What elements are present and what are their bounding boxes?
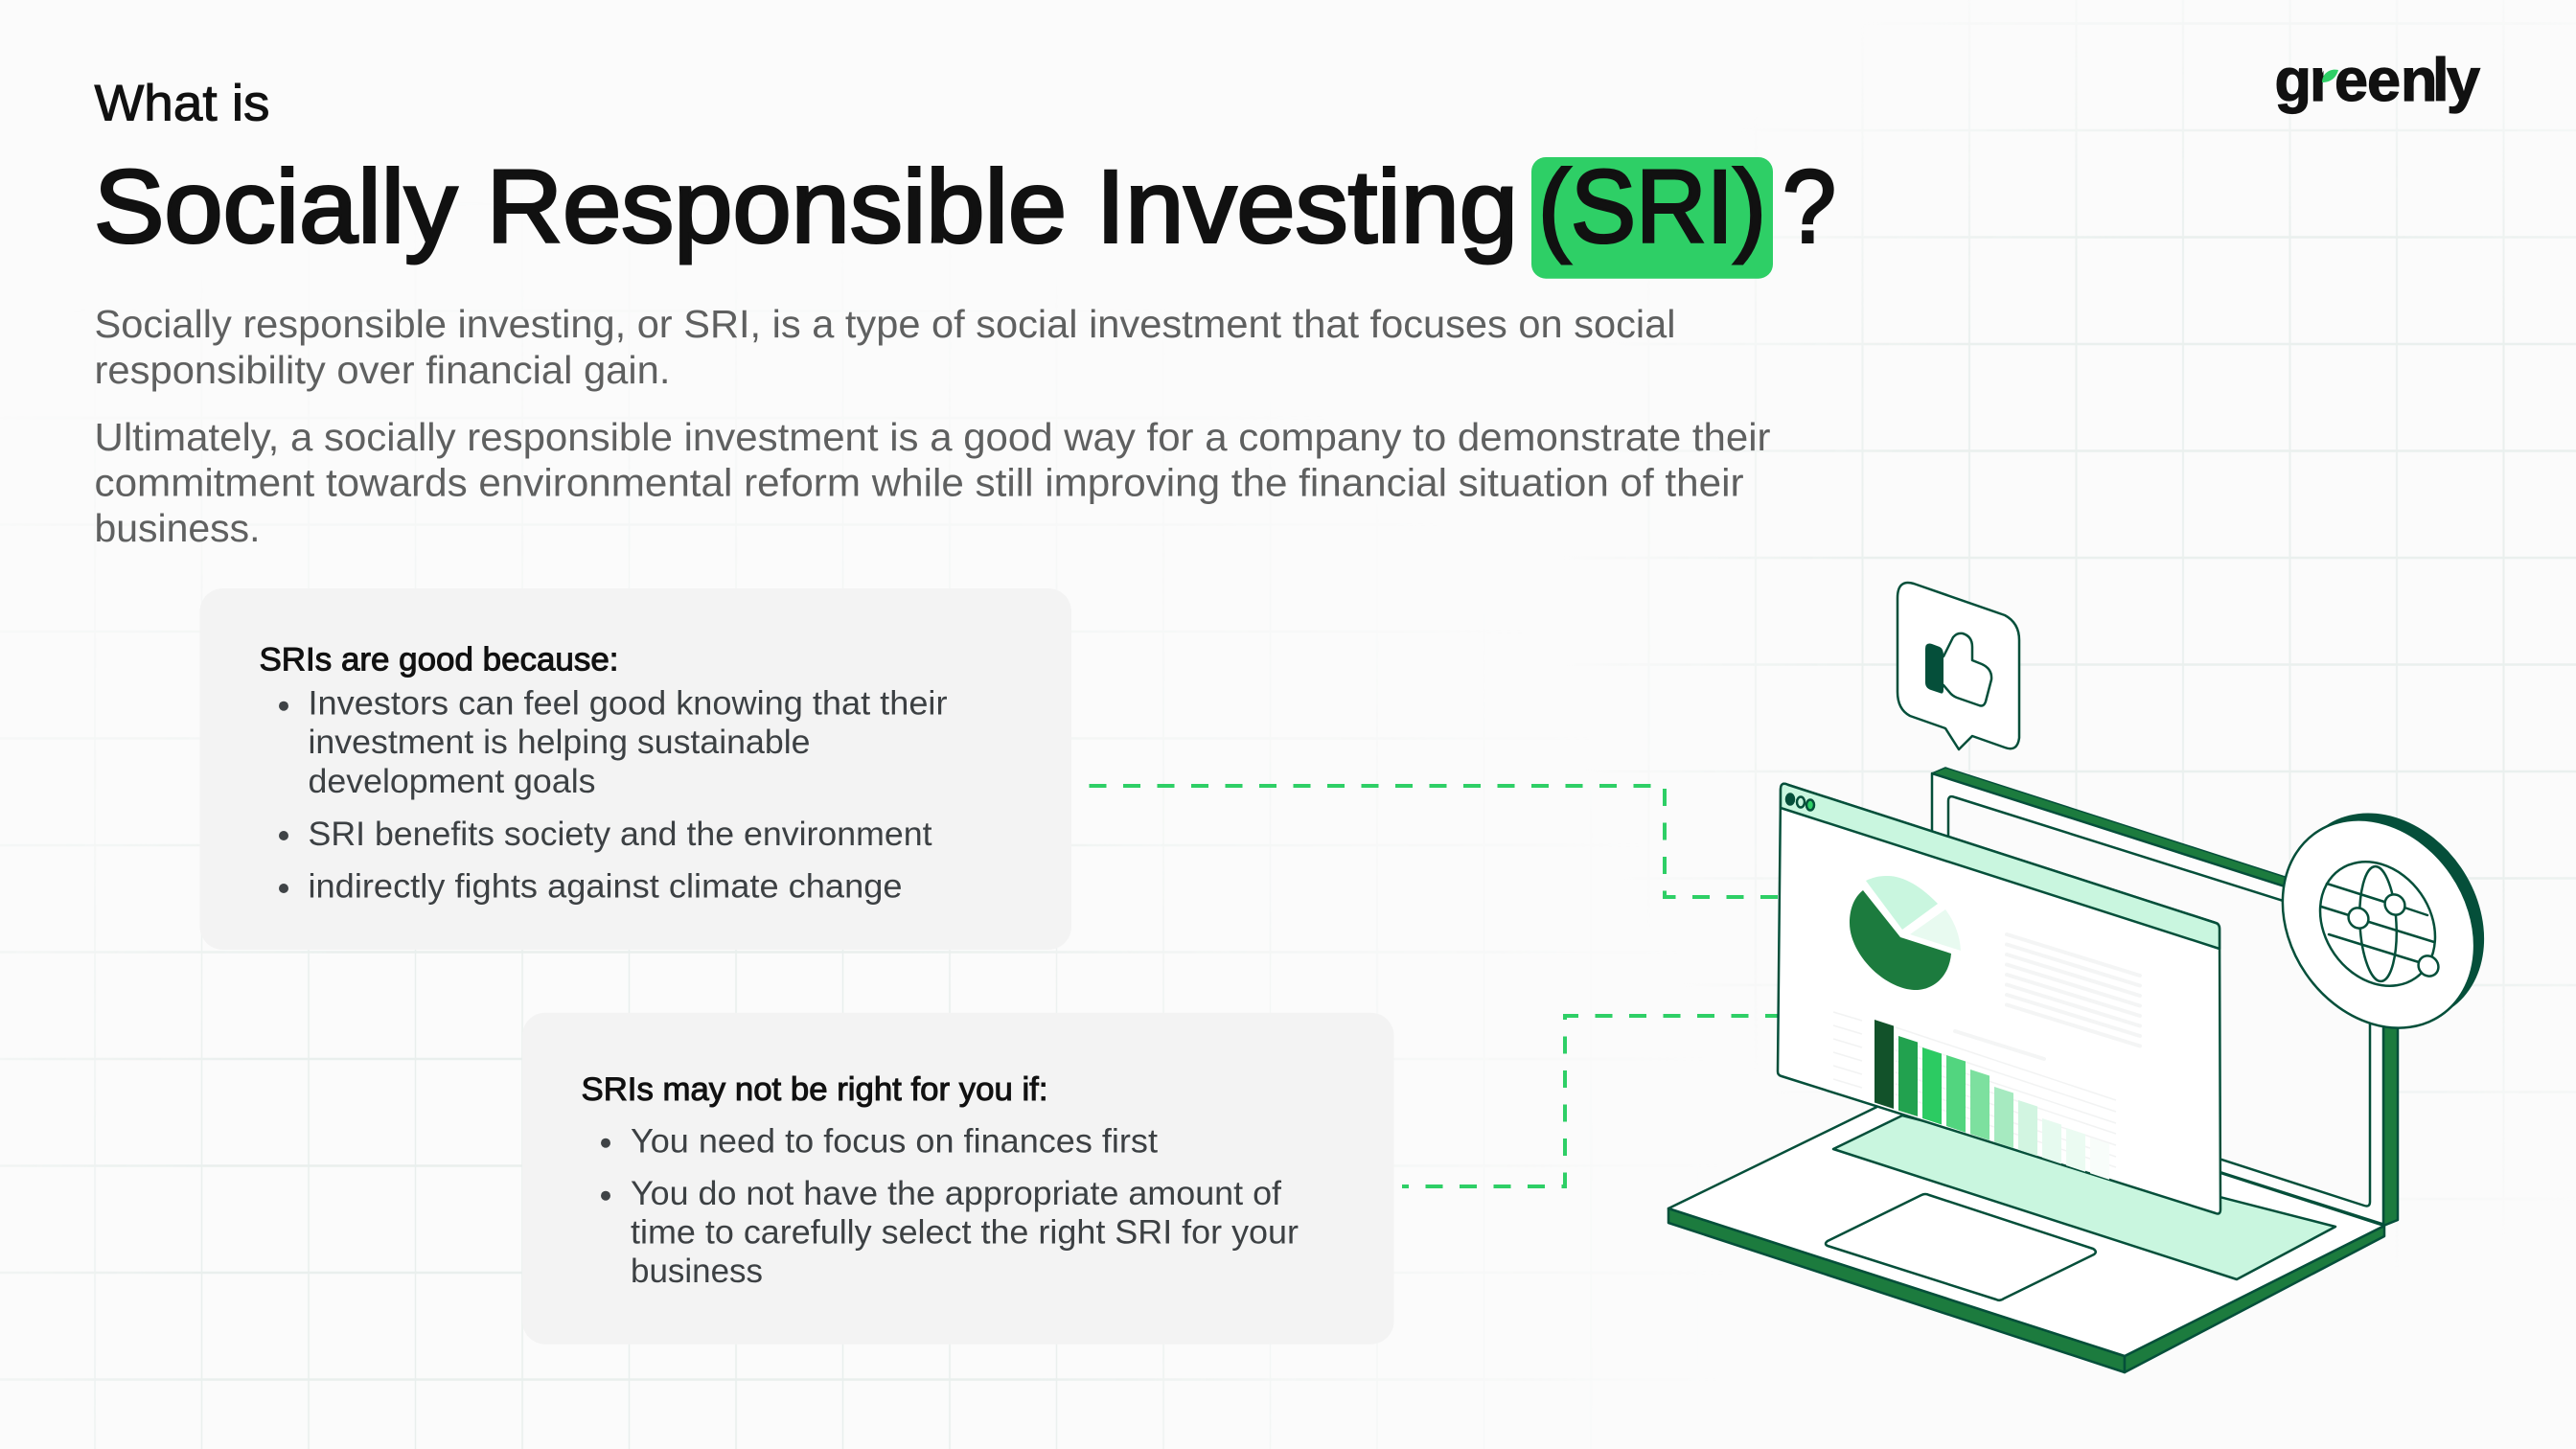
intro paragraph 2 xyxy=(94,415,1770,550)
intro paragraph 1: responsibility over financial gain. xyxy=(94,348,670,392)
bullet list: Investors can feel good knowing that their xyxy=(309,685,948,723)
icon: globe badge xyxy=(2243,776,2523,1065)
laptop screen xyxy=(1932,768,2398,1226)
bullet list: You do not have the appropriate amount of xyxy=(631,1175,1281,1212)
intro paragraph 2: business. xyxy=(94,506,261,550)
bullet list: investment is helping sustainable xyxy=(309,724,811,761)
trackpad xyxy=(1826,1194,2096,1300)
bullet list xyxy=(601,1123,1299,1290)
title text: Socially Responsible Investing xyxy=(94,149,1518,264)
highlight pill: SRI: (SRI) xyxy=(1538,149,1766,264)
title bar xyxy=(1781,784,2220,949)
connector: not-right panel to laptop xyxy=(1402,1016,1778,1186)
connector: good panel to laptop xyxy=(1086,786,1778,897)
small heading: What is: What is xyxy=(94,76,270,132)
pie chart xyxy=(1850,876,1961,990)
intro paragraph 2: commitment towards environmental reform while still improving the financial situation of their xyxy=(94,460,1744,504)
bullet list: SRI benefits society and the environment xyxy=(309,816,932,853)
text placeholder lines xyxy=(1955,934,2140,1059)
bullet list: business xyxy=(631,1253,763,1290)
intro paragraph 2: Ultimately, a socially responsible investment is a good way for a company to demonstrate their xyxy=(94,415,1770,459)
bullet list: You need to focus on finances first xyxy=(631,1123,1158,1161)
title xyxy=(94,149,1836,279)
bullet list: indirectly fights against climate change xyxy=(309,868,903,906)
bullet list: time to carefully select the right SRI for your xyxy=(631,1214,1299,1252)
panel heading: SRIs may not be right for you if: xyxy=(581,1071,1048,1108)
bar chart xyxy=(1833,1012,2116,1180)
bullet list xyxy=(279,685,948,906)
laptop base xyxy=(1668,1080,2384,1372)
logo: greenly: greenly xyxy=(2275,47,2480,114)
panel: SRIs are good because xyxy=(199,588,1071,950)
icon: thumbs-up speech bubble xyxy=(1898,583,2019,749)
illustration: laptop xyxy=(1668,768,2398,1372)
question mark: ? xyxy=(1782,149,1836,264)
panel: SRIs may not be right for you if xyxy=(522,1013,1393,1345)
keyboard xyxy=(1833,1116,2335,1279)
window controls xyxy=(1786,794,1814,811)
intro paragraph 1: Socially responsible investing, or SRI, is a type of social investment that focuses on social xyxy=(94,302,1675,346)
intro paragraph 1 xyxy=(94,302,1675,392)
bullet list: development goals xyxy=(309,763,596,800)
browser window xyxy=(1778,784,2220,1213)
panel heading: SRIs are good because: xyxy=(259,641,619,678)
